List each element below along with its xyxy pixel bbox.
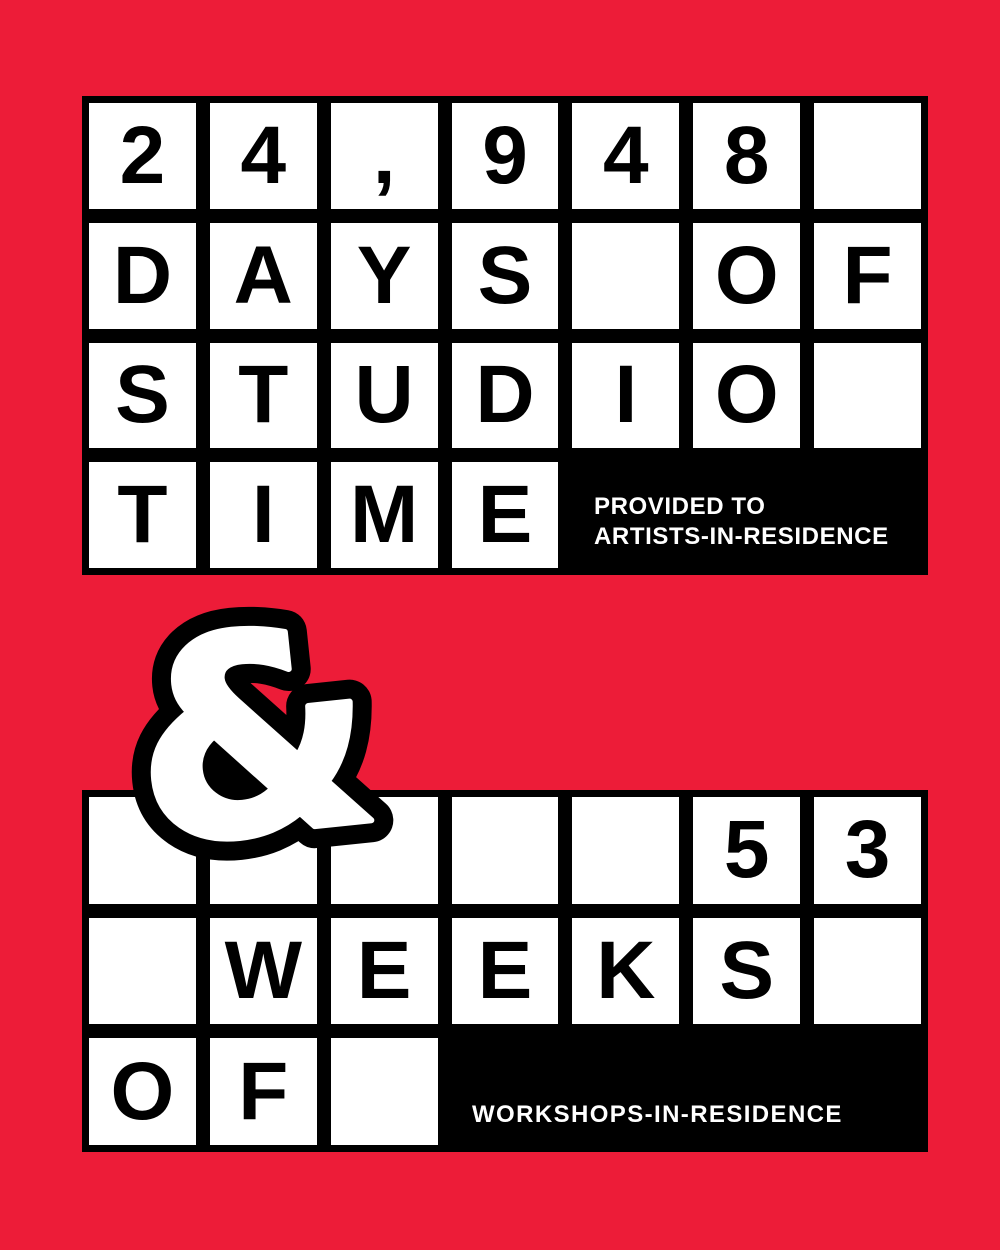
panel: top grid: 4	[603, 110, 649, 201]
panel: top grid: I	[614, 349, 637, 440]
panel: top grid: I	[252, 469, 275, 560]
text: provided to artists: PROVIDED TO	[594, 493, 766, 520]
panel: top grid: S	[478, 230, 532, 321]
panel: bottom grid: K	[596, 925, 655, 1016]
panel: top grid: 8	[724, 110, 770, 201]
panel: bottom grid	[82, 790, 928, 1152]
panel: bottom grid: 3	[845, 804, 890, 895]
panel: bottom grid: F	[238, 1046, 288, 1137]
panel: top grid: 9	[482, 110, 528, 201]
panel: top grid: 4	[240, 110, 286, 201]
text: workshops: WORKSHOPS-IN-RESIDENCE	[472, 1101, 843, 1128]
panel: top grid: 2	[120, 110, 165, 201]
panel: top grid: S	[115, 349, 170, 440]
panel: top grid: Y	[357, 230, 411, 321]
panel: top grid: D	[475, 349, 535, 440]
panel: bottom grid: S	[719, 925, 774, 1016]
panel: top grid: O	[715, 349, 779, 440]
text: provided to artists	[594, 493, 889, 550]
text: provided to artists: ARTISTS-IN-RESIDENCE	[594, 523, 889, 550]
panel: bottom grid: W	[225, 925, 302, 1016]
panel: top grid	[82, 96, 928, 575]
panel: top grid: A	[234, 230, 293, 321]
panel: top grid: T	[117, 469, 167, 560]
panel: top grid: ,	[373, 110, 396, 201]
panel: bottom grid: E	[478, 925, 532, 1016]
panel: bottom grid: E	[357, 925, 411, 1016]
panel: bottom grid: O	[111, 1046, 174, 1137]
panel: top grid: T	[238, 349, 288, 440]
icon: ampersand: &	[118, 565, 390, 900]
panel: bottom grid: 5	[724, 804, 770, 895]
icon: ampersand: &	[118, 565, 390, 900]
panel: top grid: F	[843, 230, 893, 321]
panel: top grid: E	[478, 469, 532, 560]
panel: top grid: M	[350, 469, 418, 560]
panel: top grid: U	[355, 349, 414, 440]
panel: top grid: D	[113, 230, 172, 321]
panel: top grid: O	[715, 230, 779, 321]
